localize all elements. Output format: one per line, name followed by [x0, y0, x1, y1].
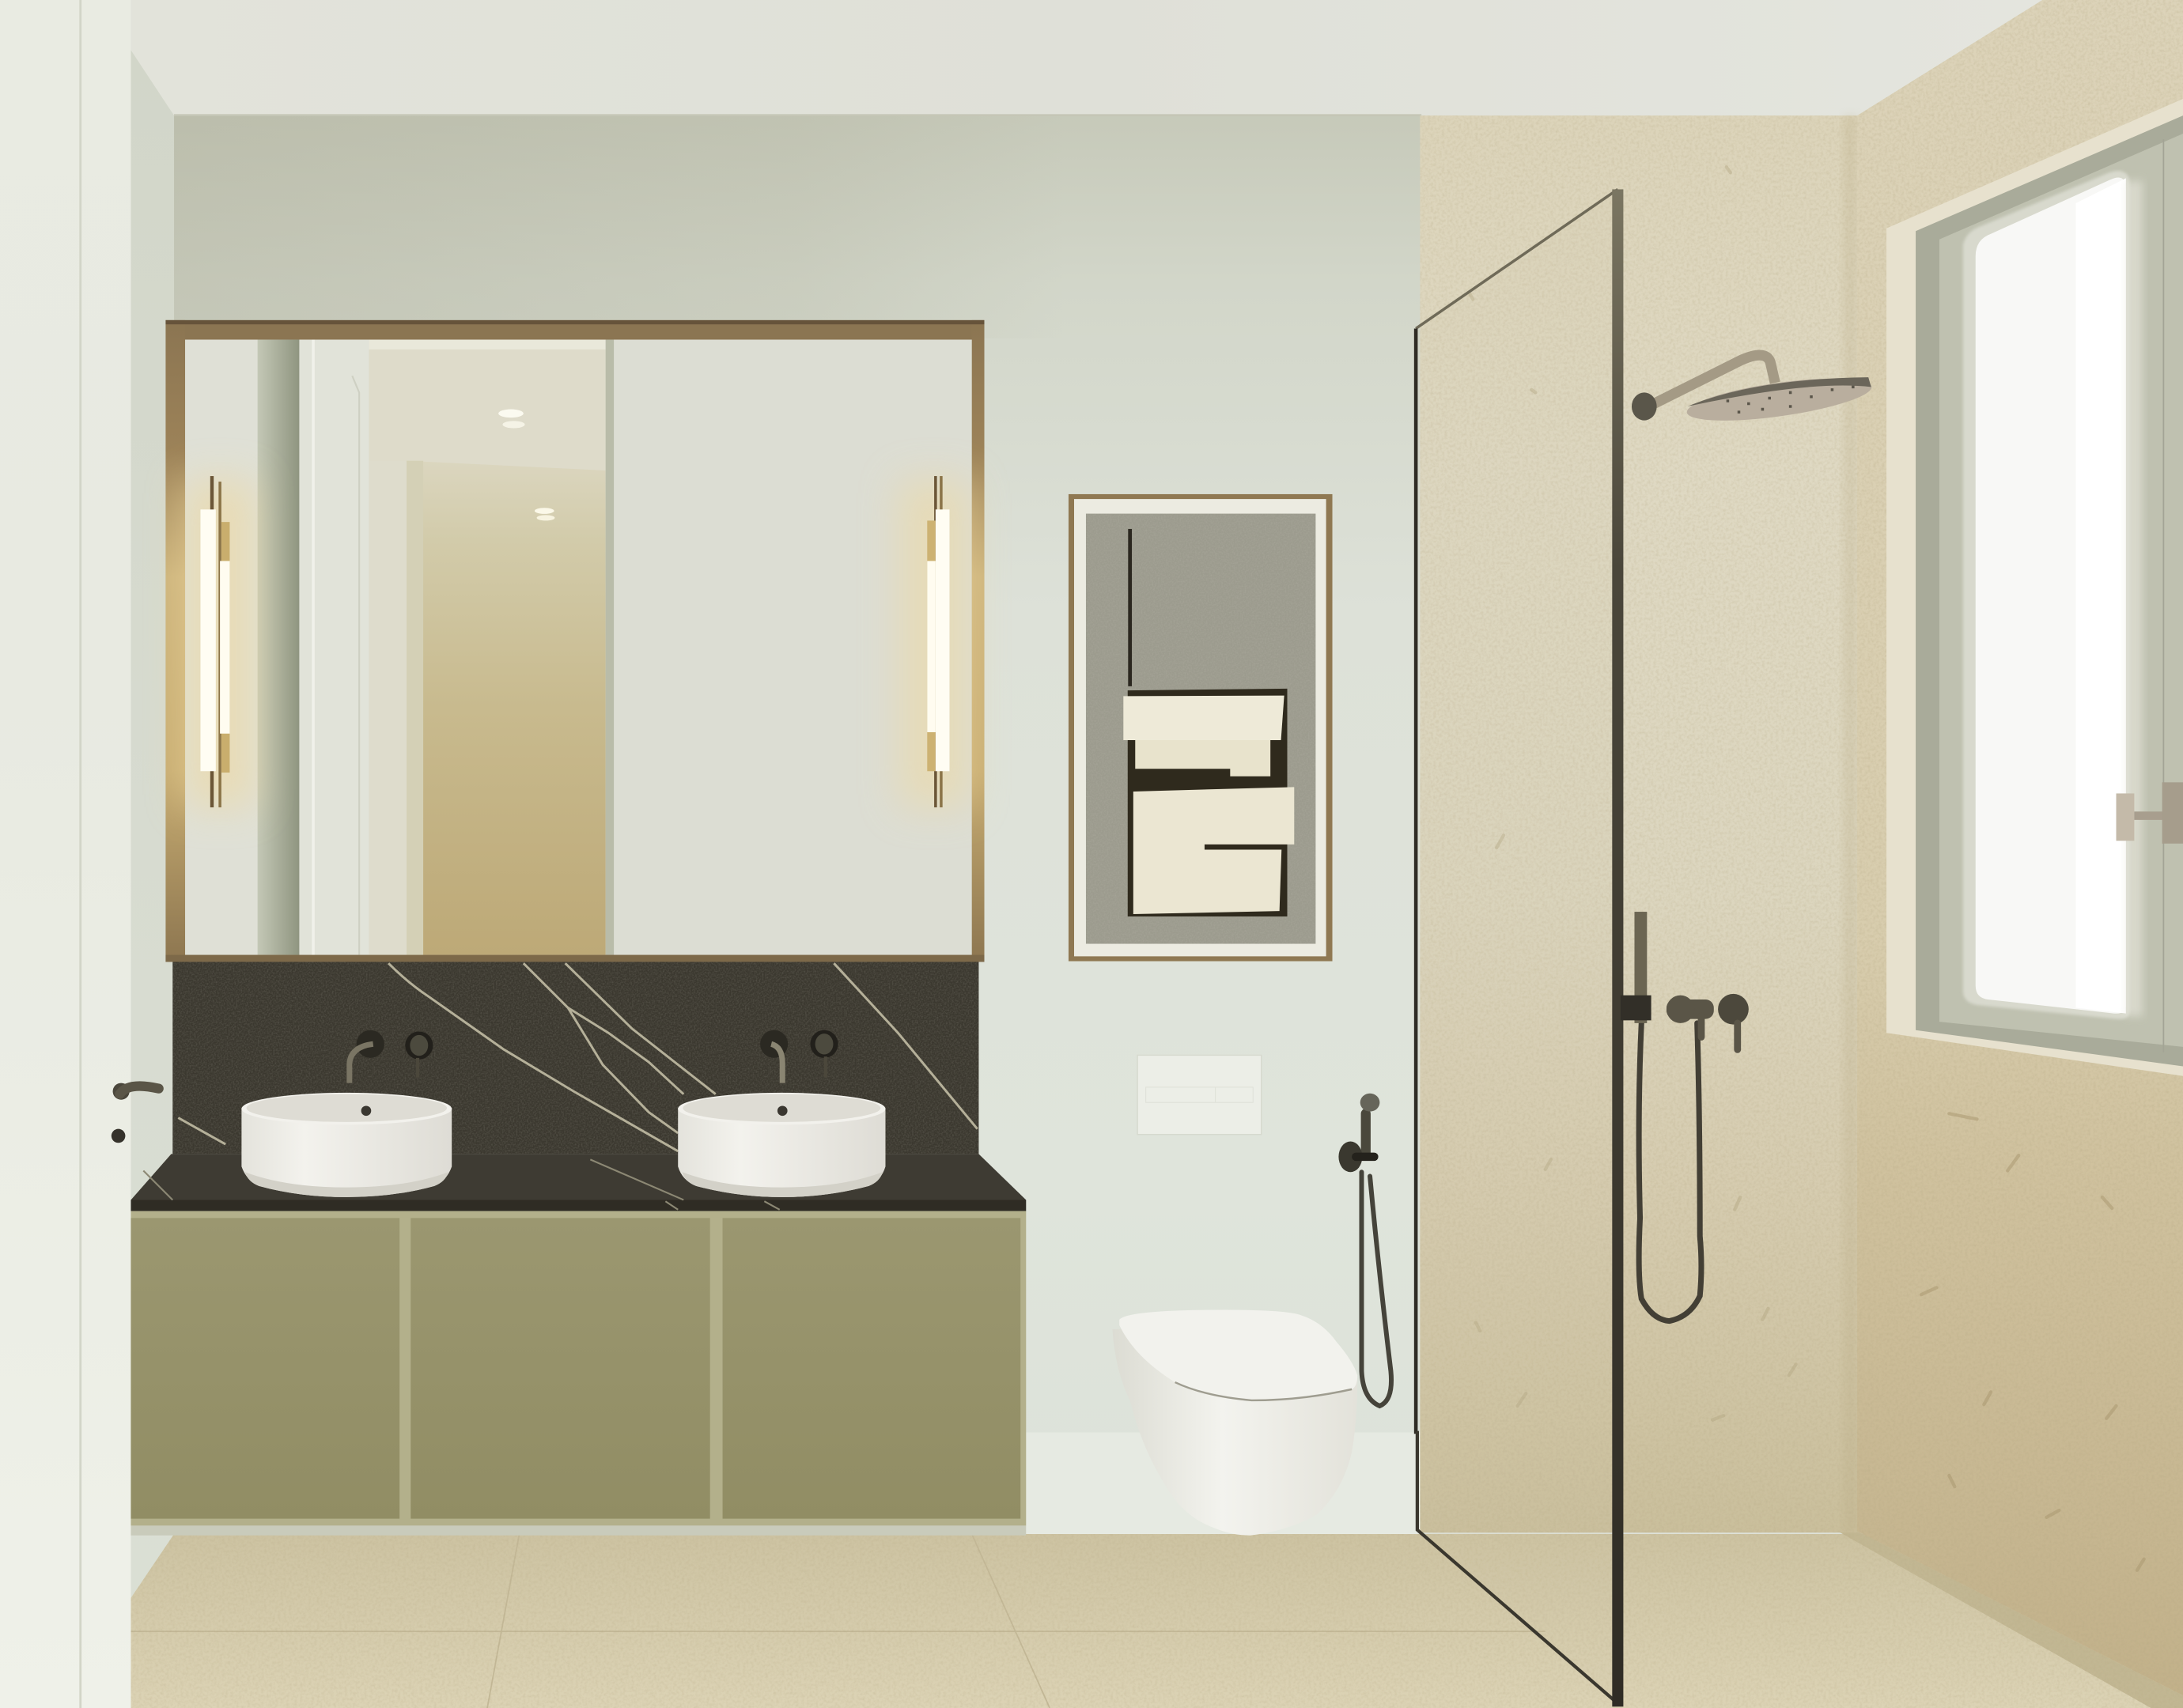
left wall tap [350, 1030, 433, 1083]
door handle [112, 1083, 159, 1143]
skirting [1025, 1432, 1420, 1534]
mirror [165, 320, 984, 962]
marble splashback [172, 962, 978, 1154]
countertop [131, 1154, 1026, 1211]
left basin [241, 1093, 452, 1197]
right stone wall [1857, 0, 2183, 1695]
vanity cabinet [131, 1211, 1026, 1536]
window handle [2117, 782, 2183, 844]
shower mixer and hose [1621, 912, 1749, 1321]
cabinet door: left [131, 1218, 399, 1519]
flush plate [1137, 1055, 1262, 1135]
shower stone back wall [1420, 115, 1860, 1532]
wall-hung toilet [1112, 1310, 1357, 1536]
cabinet door: centre [410, 1218, 710, 1519]
ceiling [131, 0, 2042, 116]
left wall light [185, 476, 255, 807]
back wall [131, 111, 1425, 1538]
mirror reflection: door [299, 340, 369, 955]
framed artwork [1069, 494, 1333, 962]
right basin [678, 1093, 885, 1197]
window [1886, 99, 2183, 1076]
cabinet door: right [723, 1218, 1020, 1519]
marble veins [178, 963, 978, 1151]
mirror reflection: dark wall column [258, 340, 299, 955]
right wall tap [760, 1030, 838, 1083]
mirror reflection: hallway [369, 340, 606, 955]
right wall light [899, 476, 969, 807]
left side wall [131, 50, 174, 1598]
toilet bowl [1112, 1322, 1357, 1536]
glass shower screen [1416, 189, 1623, 1706]
left door [0, 0, 159, 1708]
toilet lid [1119, 1310, 1357, 1400]
floor [131, 1531, 2183, 1708]
bidet spray and hose [1338, 1094, 1391, 1406]
rain shower head [1632, 355, 1874, 429]
